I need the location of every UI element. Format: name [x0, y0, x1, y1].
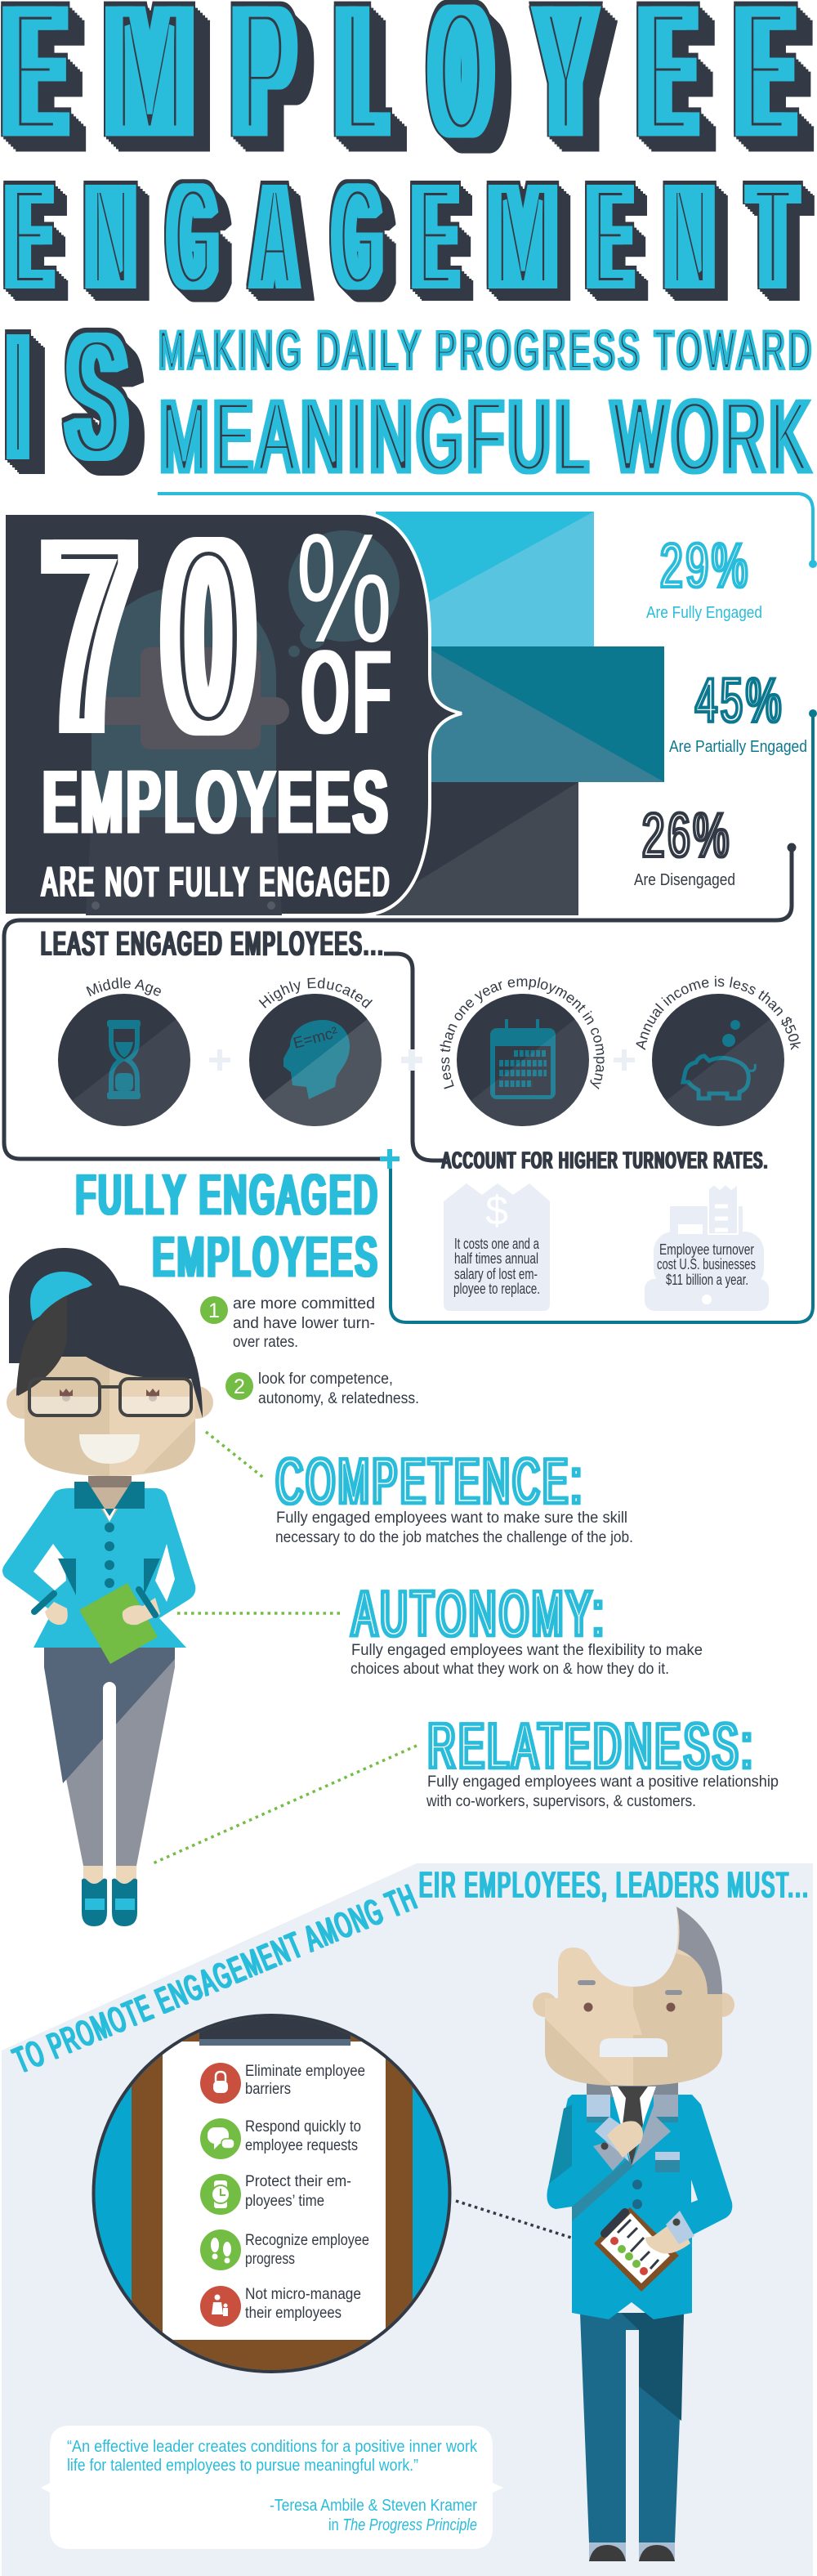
man tie	[618, 2086, 648, 2166]
man ears	[533, 1992, 557, 2017]
callout: quote bubble: -Teresa Ambile & Steven Kramer	[270, 2497, 477, 2515]
icon: less than one year employment: Less than one year employment in company	[440, 977, 605, 1089]
card: cash register: cost U.S. businesses	[657, 1256, 756, 1272]
stat: 26 percent: 26%	[642, 801, 732, 870]
item: recognize progress: progress	[245, 2251, 295, 2268]
heading: to promote engagement: TO PROMOTE ENGAGEMENT AMONG TH	[8, 1876, 423, 2081]
item: not micro-manage: their employees	[245, 2305, 342, 2322]
woman hands	[45, 1602, 68, 1625]
man hair	[676, 1907, 722, 1994]
item: eliminate barriers	[200, 2063, 365, 2104]
text: of: OF	[302, 628, 395, 756]
icon: cyan plus	[380, 1149, 400, 1169]
list item 2	[225, 1371, 419, 1407]
heading: fully engaged employees: FULLY ENGAGED	[76, 1164, 380, 1226]
woman hair	[16, 1285, 203, 1418]
icon: middle age	[58, 977, 190, 1126]
illustration: fully engaged woman	[2, 1248, 213, 1926]
list item 1: over rates.	[233, 1334, 298, 1351]
stat: 26 percent: Are Disengaged	[634, 871, 735, 889]
chart: engagement bars	[376, 512, 664, 915]
man pocket	[655, 2152, 680, 2160]
card: cash register	[645, 1184, 769, 1311]
text: employees: EMPLOYEES	[43, 755, 391, 850]
section: competence: COMPETENCE:	[276, 1445, 585, 1517]
man buttons	[632, 2180, 642, 2189]
illustration: leader man	[533, 1907, 734, 2561]
man eyes and brows	[583, 2002, 593, 2012]
card: salary price tag: $	[485, 1187, 508, 1233]
woman feet	[83, 1866, 103, 1890]
icon: highly educated: Highly Educated	[258, 977, 373, 1008]
item: respond quickly: employee requests	[245, 2137, 358, 2154]
stat: 70	[50, 491, 246, 781]
item: respond quickly: Respond quickly to	[245, 2118, 361, 2135]
item: eliminate barriers: Eliminate employee	[245, 2063, 365, 2080]
woman glasses	[29, 1379, 191, 1415]
section: competence: necessary to do the job matches the challenge of the job.	[275, 1529, 633, 1546]
title: Is: I	[12, 303, 24, 490]
icon: ghost employee watermark	[81, 530, 400, 915]
list item 2: 2	[234, 1375, 245, 1398]
section: autonomy: Fully engaged employees want the flexibility to make	[351, 1642, 703, 1659]
plus sign	[401, 1049, 422, 1071]
woman eyes	[60, 1389, 159, 1402]
item: recognize progress	[200, 2229, 369, 2270]
icon: highly educated	[249, 977, 382, 1126]
man socks	[589, 2542, 626, 2561]
title: Engagement: G	[339, 159, 376, 314]
item: recognize progress: Recognize employee	[245, 2232, 369, 2249]
title: Engagement: E	[418, 159, 452, 315]
plus sign	[209, 1049, 230, 1071]
stat: 29 percent: Are Fully Engaged	[646, 604, 762, 622]
woman ears	[7, 1386, 39, 1419]
woman jacket	[2, 1488, 195, 1648]
plus sign	[614, 1049, 635, 1071]
stat: 29 percent	[646, 531, 762, 622]
woman bun	[9, 1248, 120, 1363]
card: salary price tag: It costs one and a	[454, 1236, 540, 1252]
illustration: magnified clipboard	[93, 2010, 449, 2378]
card: cash register: $11 billion a year.	[666, 1272, 748, 1288]
card: salary price tag: ployee to replace.	[453, 1281, 540, 1297]
heading: least engaged employees: LEAST ENGAGED EMPLOYEES...	[41, 926, 385, 962]
icon: middle age: Middle Age	[87, 977, 161, 997]
callout: quote bubble: “An effective leader creates conditions for a positive inner work	[67, 2438, 478, 2456]
card: salary price tag	[444, 1183, 550, 1311]
list item 2: look for competence,	[258, 1371, 393, 1388]
woman face	[25, 1357, 195, 1476]
item: not micro-manage: Not micro-manage	[245, 2286, 361, 2303]
list item 1: 1	[208, 1299, 220, 1322]
title: Engagement: G	[174, 160, 212, 315]
title: Is: S	[71, 303, 122, 490]
woman smile	[79, 1434, 140, 1464]
item: protect time: Protect their em-	[245, 2173, 351, 2190]
icon: annual income piggy bank	[636, 976, 801, 1126]
section: autonomy: choices about what they work on & how they do it.	[350, 1661, 669, 1678]
title: Engagement: N	[92, 159, 130, 315]
section: competence	[275, 1445, 633, 1546]
title: Engagement: T	[754, 159, 792, 314]
callout: quote bubble: in The Progress Principle	[328, 2516, 477, 2534]
title: Engagement: M	[493, 159, 552, 315]
connector: teal line	[391, 709, 817, 1322]
icon: annual income piggy bank: Annual income is less than $50k	[636, 976, 801, 1050]
heading: fully engaged employees: EMPLOYEES	[153, 1226, 380, 1288]
title: Engagement: N	[671, 160, 708, 315]
man shoes	[589, 2545, 626, 2561]
stat: 70: 7	[50, 491, 129, 781]
callout: quote bubble: life for talented employees to pursue meaningful work.”	[67, 2457, 418, 2475]
stat: 26 percent	[634, 801, 735, 889]
dotted line: competence	[206, 1432, 266, 1479]
man lower hand	[645, 2218, 690, 2254]
man cuff	[593, 2142, 625, 2171]
title: Engagement: E	[11, 160, 47, 315]
section: competence: Fully engaged employees want to make sure the skill	[276, 1509, 627, 1527]
stat: 45 percent	[669, 666, 807, 756]
title: Is	[12, 303, 122, 490]
section: autonomy	[350, 1577, 703, 1678]
connector: dark line around least engaged	[4, 845, 794, 1161]
item: not micro-manage	[200, 2286, 361, 2327]
stat: 29 percent: 29%	[660, 531, 751, 601]
stat: percent sign: %	[296, 502, 392, 675]
item: protect time: ployees’ time	[245, 2193, 324, 2210]
list item 1: and have lower turn-	[233, 1315, 375, 1332]
panel: leaders background	[2, 1863, 813, 2576]
connector: cyan line to 29 percent	[158, 494, 817, 568]
title: Employee	[11, 0, 786, 168]
man lapel	[632, 2095, 671, 2166]
panel: 70 percent	[4, 491, 462, 915]
dotted line: clipboard callout	[456, 2201, 589, 2243]
item: protect time	[200, 2173, 351, 2215]
section: relatedness	[426, 1710, 779, 1810]
text: are not fully engaged: ARE NOT FULLY ENGAGED	[42, 859, 391, 905]
card: salary price tag: salary of lost em-	[454, 1266, 538, 1282]
list item 1	[200, 1295, 375, 1351]
title: Engagement: A	[259, 159, 290, 314]
man face	[545, 1907, 722, 2086]
stat: 70: 0	[171, 491, 246, 781]
man shirt	[610, 2086, 656, 2166]
woman neck	[88, 1476, 132, 1487]
section: relatedness: with co-workers, supervisors, & customers.	[426, 1793, 696, 1810]
man trousers	[580, 2313, 684, 2542]
heading: fully engaged employees	[76, 1164, 380, 1288]
icon: highly educated: E=mc²	[292, 1024, 340, 1053]
item: eliminate barriers: barriers	[245, 2081, 291, 2098]
heading: to promote engagement	[8, 1865, 810, 2081]
dotted line: relatedness	[151, 1746, 417, 1864]
item: respond quickly	[200, 2118, 361, 2159]
title: Engagement	[11, 159, 792, 315]
man moustache	[600, 2038, 667, 2057]
section: autonomy: AUTONOMY:	[352, 1577, 607, 1649]
man hand	[607, 2121, 643, 2158]
dotted line: autonomy	[177, 1612, 342, 1615]
card: salary price tag: half times annual	[454, 1250, 538, 1267]
man neck and collar	[587, 2082, 678, 2097]
title: Engagement: E	[593, 159, 627, 315]
card: cash register: Employee turnover	[659, 1241, 754, 1258]
list item 2: autonomy, & relatedness.	[258, 1390, 419, 1407]
man clipboard	[594, 2207, 679, 2292]
list item 1: are more committed	[233, 1295, 375, 1313]
callout: quote bubble	[41, 2426, 503, 2549]
section: relatedness: Fully engaged employees want a positive relationship	[427, 1773, 779, 1791]
man right arm and body	[547, 2095, 732, 2319]
woman trousers	[44, 1648, 175, 1866]
woman folder	[79, 1583, 158, 1664]
